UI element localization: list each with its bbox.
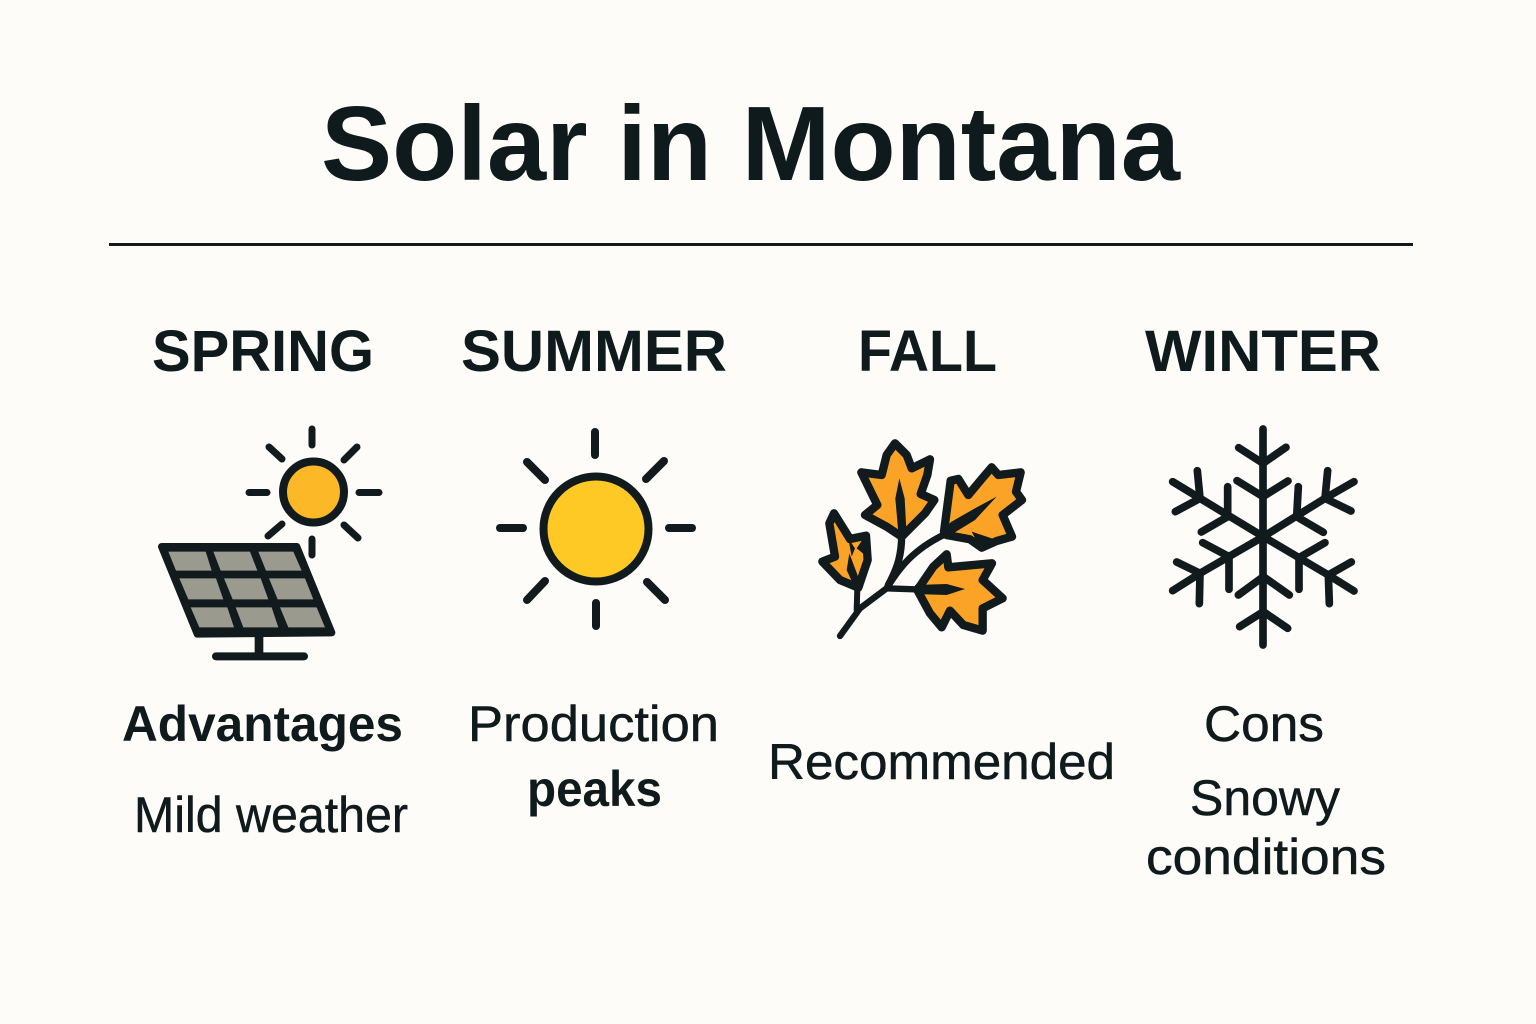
title: Solar in Montana [321,85,1181,203]
icon: snowflake [1173,429,1354,645]
heading: summer: SUMMER [461,319,727,384]
text: recommended: Recommended [768,734,1115,790]
panel: summer [461,319,727,817]
label: cons: Cons [1204,696,1324,752]
heading: spring: SPRING [152,319,374,384]
text: mild weather: Mild weather [134,787,408,843]
icon: autumn leaves [822,443,1022,636]
heading: fall: FALL [858,319,997,384]
text: snowy: Snowy [1190,770,1340,826]
text: production: Production [468,696,719,752]
panel: winter [1145,319,1386,885]
heading: winter: WINTER [1145,319,1381,384]
label: advantages: Advantages [122,696,403,752]
panel: spring [122,319,408,843]
panel: fall [768,319,1115,790]
text: conditions: conditions [1146,829,1386,885]
text: peaks: peaks [527,761,662,817]
icon: sun [500,432,692,626]
icon: solar panel with sun [162,429,379,656]
